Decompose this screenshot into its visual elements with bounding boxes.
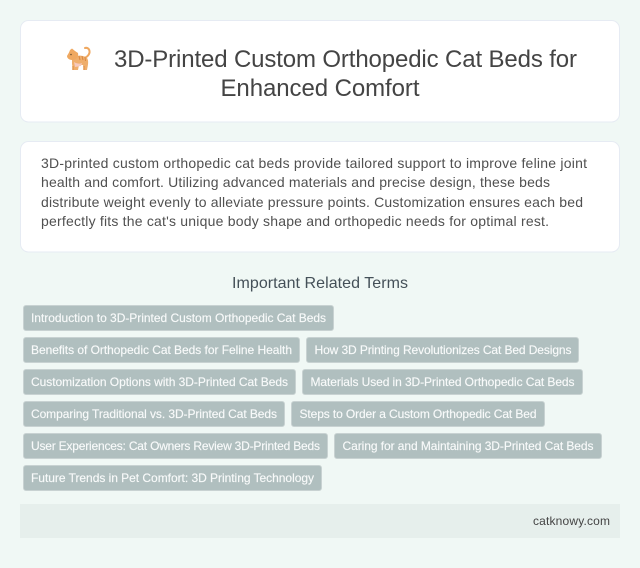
title: Enhanced Comfort [220, 75, 420, 102]
pill: future trends [24, 466, 322, 490]
title [114, 46, 577, 102]
pill: user experiences: User Experiences: Cat Owners Review 3D-Printed Beds [31, 439, 320, 453]
pill: introduction [24, 306, 334, 330]
pill: future trends: Future Trends in Pet Comfort: 3D Printing Technology [31, 471, 314, 485]
pill: comparing: Comparing Traditional vs. 3D-Printed Cat Beds [31, 407, 277, 421]
pill: steps [292, 402, 544, 426]
title: 3D-Printed Custom Orthopedic Cat Beds for [114, 46, 577, 73]
icon: orange cat [67, 48, 90, 70]
pill: how 3d printing [306, 338, 578, 362]
pill: user experiences [24, 434, 328, 458]
text block: description: health and comfort. Utilizing advanced materials and precise design, these beds [41, 174, 550, 190]
pill: how 3d printing: How 3D Printing Revolutionizes Cat Bed Designs [314, 343, 572, 357]
pill: caring [334, 434, 602, 458]
pill: benefits [24, 338, 300, 362]
text block: description: distribute weight evenly to alleviate pressure points. Customization ensures each bed [41, 194, 583, 210]
text block: description: perfectly fits the cat's unique body shape and orthopedic needs for optimal rest. [41, 213, 549, 229]
pill: benefits: Benefits of Orthopedic Cat Beds for Feline Health [31, 343, 292, 357]
heading: important related terms: Important Related Terms [232, 275, 408, 292]
pill: materials [302, 370, 582, 394]
text block: description [41, 155, 587, 229]
pill: materials: Materials Used in 3D-Printed Orthopedic Cat Beds [310, 375, 574, 389]
panel: title card [20, 20, 620, 122]
panel: description card [20, 142, 620, 252]
pill: customization: Customization Options with 3D-Printed Cat Beds [31, 375, 288, 389]
footer text: catknowy.com [533, 514, 610, 528]
related term pills [24, 306, 602, 490]
pill: customization [24, 370, 296, 394]
footer bar [20, 504, 620, 538]
text block: description: 3D-printed custom orthopedic cat beds provide tailored support to improve feline joint [41, 155, 587, 171]
pill: caring: Caring for and Maintaining 3D-Printed Cat Beds [342, 439, 594, 453]
pill: comparing [24, 402, 284, 426]
pill: introduction: Introduction to 3D-Printed Custom Orthopedic Cat Beds [31, 311, 326, 325]
pill: steps: Steps to Order a Custom Orthopedic Cat Bed [300, 407, 536, 421]
